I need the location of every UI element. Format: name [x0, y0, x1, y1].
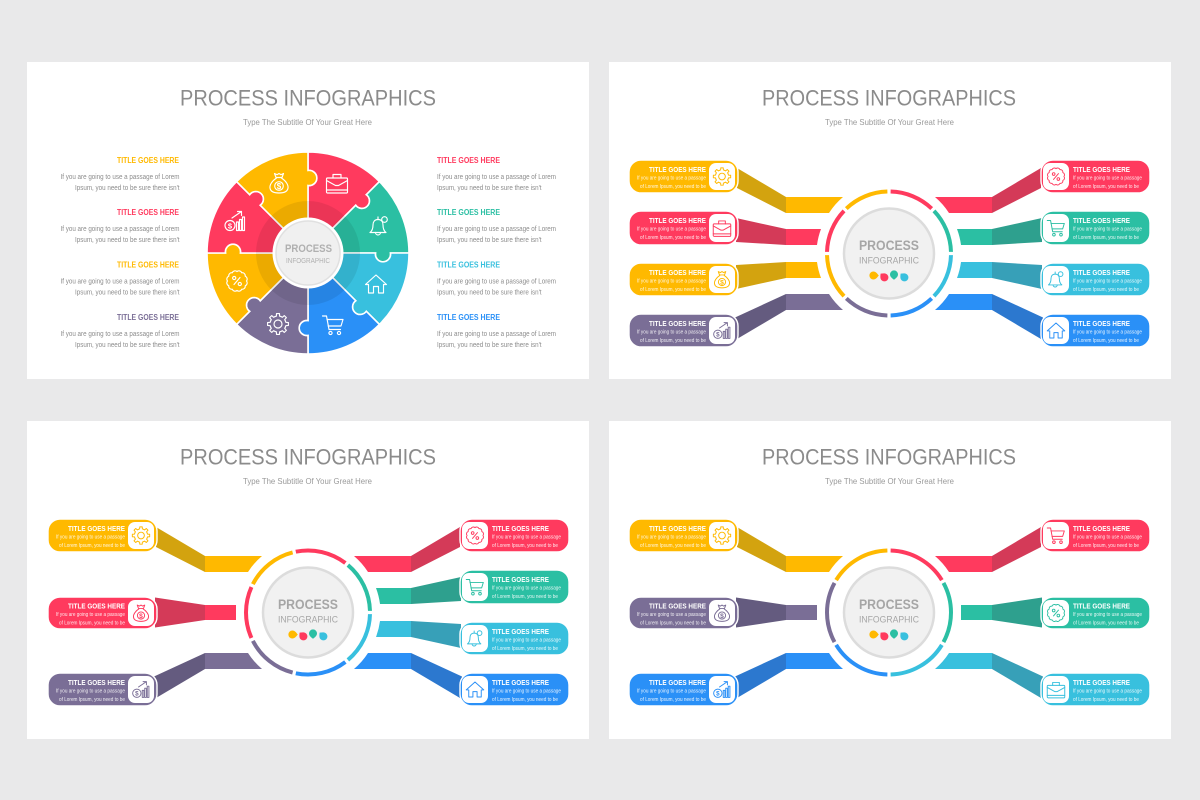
icon: percent badge: [227, 271, 247, 291]
tag: green cart: of Lorem Ipsum, you need to be: [1073, 235, 1139, 241]
tag: red cart: of Lorem Ipsum, you need to be: [1073, 543, 1139, 549]
text block left 3: If you are going to use a passage of Lorem: [60, 278, 180, 286]
tag: red percent: TITLE GOES HERE: [492, 524, 549, 533]
title: PROCESS INFOGRAPHICS: [762, 86, 1016, 110]
text block left 3: Ipsum, you need to be sure there isn't: [75, 290, 180, 296]
puzzle wheel: [186, 131, 430, 375]
icon: home: [366, 275, 386, 293]
tag: purple chart: of Lorem Ipsum, you need to be: [59, 697, 125, 703]
tag: red percent: of Lorem Ipsum, you need to be: [492, 543, 558, 549]
tag: yellow gear: [629, 519, 738, 552]
text block left 4: TITLE GOES HERE: [117, 313, 180, 322]
tag: yellow money bag: TITLE GOES HERE: [649, 268, 706, 277]
tag: cyan briefcase: If you are going to use a passage: [1073, 688, 1142, 694]
tag: purple chart: TITLE GOES HERE: [68, 678, 125, 687]
tag: blue home: TITLE GOES HERE: [1073, 319, 1130, 328]
subtitle: Type The Subtitle Of Your Great Here: [825, 117, 954, 127]
tag: red percent: [460, 519, 569, 552]
tag: green percent: If you are going to use a passage: [1073, 612, 1142, 618]
tag: blue home: [460, 673, 569, 706]
tag: green cart: [460, 570, 569, 604]
text block left 1: Ipsum, you need to be sure there isn't: [75, 185, 180, 192]
tag: red percent: of Lorem Ipsum, you need to be: [1073, 184, 1139, 190]
connectors and hub: [735, 168, 1043, 339]
tag: purple money bag: of Lorem Ipsum, you need to be: [640, 620, 706, 626]
title: PROCESS INFOGRAPHICS: [180, 444, 436, 470]
text block right 2: Ipsum, you need to be sure there isn't: [437, 237, 542, 244]
tag: red cart: TITLE GOES HERE: [1073, 524, 1130, 533]
text block left 4: If you are going to use a passage of Lorem: [60, 331, 180, 338]
tag: blue home: of Lorem Ipsum, you need to be: [492, 697, 558, 703]
tag: green percent: [1041, 597, 1150, 629]
tag: red briefcase: If you are going to use a passage: [637, 226, 706, 232]
text block right 3: [437, 260, 556, 296]
tag: blue home: TITLE GOES HERE: [492, 678, 549, 687]
tag: purple chart: TITLE GOES HERE: [649, 319, 706, 328]
icon: growth chart: [225, 212, 244, 230]
tag: blue chart: [629, 673, 738, 706]
text block left 1: [60, 156, 180, 192]
title: PROCESS INFOGRAPHICS: [180, 86, 436, 110]
tag: purple money bag: If you are going to use a passage: [637, 612, 706, 618]
tag: red cart: If you are going to use a passage: [1073, 534, 1142, 540]
tag: green cart: TITLE GOES HERE: [492, 575, 549, 584]
tag: yellow gear: If you are going to use a passage: [56, 534, 125, 540]
text block right 1: Ipsum, you need to be sure there isn't: [437, 185, 542, 192]
tag: purple money bag: TITLE GOES HERE: [649, 602, 706, 610]
text block right 2: [437, 208, 556, 244]
tag: red percent: TITLE GOES HERE: [1073, 165, 1130, 174]
tag: cyan bell: If you are going to use a passage: [492, 638, 561, 644]
tag: yellow gear: TITLE GOES HERE: [649, 165, 706, 174]
text block right 4: If you are going to use a passage of Lorem: [437, 331, 556, 338]
tag: blue chart: If you are going to use a passage: [637, 688, 706, 694]
connectors and hub: INFOGRAPHIC: [278, 614, 338, 624]
panel: eight-step connector slide: [609, 62, 1171, 379]
tag: yellow gear: TITLE GOES HERE: [68, 524, 125, 533]
tag: blue chart: of Lorem Ipsum, you need to be: [640, 697, 706, 703]
tag: yellow gear: of Lorem Ipsum, you need to be: [640, 184, 706, 190]
wheel hub label: [285, 243, 332, 265]
tag: green percent: of Lorem Ipsum, you need to be: [1073, 620, 1139, 626]
tag: purple chart: If you are going to use a passage: [637, 330, 706, 336]
tag: cyan briefcase: of Lorem Ipsum, you need to be: [1073, 697, 1139, 703]
text block left 2: Ipsum, you need to be sure there isn't: [75, 237, 180, 244]
tag: yellow gear: If you are going to use a passage: [637, 176, 706, 182]
tag: blue home: If you are going to use a passage: [492, 688, 561, 694]
tag: cyan bell: [460, 622, 569, 655]
icon: money bag: [270, 174, 288, 193]
tag: yellow gear: [629, 160, 738, 193]
tag: red cart: [1041, 519, 1150, 552]
tag: yellow money bag: If you are going to use a passage: [637, 278, 706, 284]
tag: red percent: [1041, 160, 1150, 193]
text block left 4: Ipsum, you need to be sure there isn't: [75, 342, 180, 349]
panel: puzzle wheel slide: [27, 62, 589, 379]
tag: red briefcase: of Lorem Ipsum, you need to be: [640, 235, 706, 241]
tag: red money bag: TITLE GOES HERE: [68, 602, 125, 610]
text block right 4: [437, 313, 556, 349]
tag: yellow gear: TITLE GOES HERE: [649, 524, 706, 533]
icon: cart: [322, 316, 343, 335]
tag: purple chart: [48, 673, 157, 706]
tag: blue chart: TITLE GOES HERE: [649, 678, 706, 687]
connectors and hub: INFOGRAPHIC: [859, 255, 919, 265]
tag: yellow gear: If you are going to use a passage: [637, 534, 706, 540]
text block right 2: TITLE GOES HERE: [437, 208, 501, 217]
tag: green percent: TITLE GOES HERE: [1073, 602, 1130, 610]
tag: blue home: of Lorem Ipsum, you need to be: [1073, 338, 1139, 344]
tag: red money bag: If you are going to use a passage: [56, 612, 125, 618]
text block right 3: If you are going to use a passage of Lorem: [437, 278, 556, 286]
text block right 2: If you are going to use a passage of Lorem: [437, 226, 556, 233]
tag: cyan bell: of Lorem Ipsum, you need to be: [492, 646, 558, 652]
connectors and hub: [154, 527, 462, 698]
tag: red money bag: [48, 597, 157, 629]
title: PROCESS INFOGRAPHICS: [762, 444, 1016, 470]
tag: purple money bag: [629, 597, 738, 629]
wheel hub label: INFOGRAPHIC: [286, 258, 330, 265]
tag: cyan bell: If you are going to use a passage: [1073, 278, 1142, 284]
text block right 1: [437, 156, 556, 192]
text block right 4: TITLE GOES HERE: [437, 313, 501, 322]
text block left 1: If you are going to use a passage of Lorem: [60, 174, 180, 181]
tag: cyan bell: TITLE GOES HERE: [1073, 268, 1130, 277]
tag: red percent: If you are going to use a passage: [1073, 176, 1142, 182]
text block right 3: TITLE GOES HERE: [437, 260, 501, 270]
icon: gear: [268, 314, 288, 334]
tag: red briefcase: [629, 211, 738, 245]
text block left 4: [60, 313, 180, 349]
connectors and hub: INFOGRAPHIC: [859, 614, 919, 624]
tag: yellow gear: of Lorem Ipsum, you need to be: [640, 543, 706, 549]
tag: yellow gear: of Lorem Ipsum, you need to be: [59, 543, 125, 549]
text block right 4: Ipsum, you need to be sure there isn't: [437, 342, 542, 349]
text block left 2: If you are going to use a passage of Lorem: [60, 226, 180, 233]
connectors and hub: PROCESS: [859, 597, 919, 612]
tag: cyan bell: [1041, 263, 1150, 296]
icon: briefcase: [326, 174, 348, 193]
text block left 2: [60, 208, 180, 244]
tag: cyan bell: of Lorem Ipsum, you need to be: [1073, 287, 1139, 293]
text block right 1: If you are going to use a passage of Lorem: [437, 174, 556, 181]
panel: six-step connector slide: [609, 421, 1171, 739]
text block left 3: [60, 260, 180, 296]
text block right 1: TITLE GOES HERE: [437, 156, 501, 165]
tag: purple chart: If you are going to use a passage: [56, 688, 125, 694]
subtitle: Type The Subtitle Of Your Great Here: [243, 476, 372, 486]
connectors and hub: [735, 527, 1043, 698]
tag: yellow money bag: of Lorem Ipsum, you need to be: [640, 287, 706, 293]
connectors and hub: PROCESS: [278, 597, 338, 612]
tag: green cart: If you are going to use a passage: [1073, 226, 1142, 232]
tag: cyan briefcase: TITLE GOES HERE: [1073, 678, 1130, 687]
text block left 2: TITLE GOES HERE: [117, 208, 180, 217]
text block left 1: TITLE GOES HERE: [117, 156, 180, 165]
tag: red briefcase: TITLE GOES HERE: [649, 216, 706, 225]
tag: green cart: of Lorem Ipsum, you need to be: [492, 594, 558, 600]
tag: green cart: If you are going to use a passage: [492, 586, 561, 592]
wheel hub label: PROCESS: [285, 243, 332, 255]
subtitle: Type The Subtitle Of Your Great Here: [825, 476, 954, 486]
tag: green cart: TITLE GOES HERE: [1073, 216, 1130, 225]
tag: purple chart: [629, 314, 738, 347]
tag: blue home: If you are going to use a passage: [1073, 330, 1142, 336]
tag: blue home: [1041, 314, 1150, 347]
tag: purple chart: of Lorem Ipsum, you need to be: [640, 338, 706, 344]
connectors and hub: PROCESS: [859, 238, 919, 253]
subtitle: Type The Subtitle Of Your Great Here: [243, 117, 372, 127]
tag: red percent: If you are going to use a passage: [492, 534, 561, 540]
tag: cyan briefcase: [1041, 673, 1150, 706]
tag: red money bag: of Lorem Ipsum, you need to be: [59, 620, 125, 626]
tag: yellow gear: [48, 519, 157, 552]
text block left 3: TITLE GOES HERE: [117, 260, 180, 270]
tag: yellow money bag: [629, 263, 738, 296]
tag: cyan bell: TITLE GOES HERE: [492, 627, 549, 636]
text block right 3: Ipsum, you need to be sure there isn't: [437, 290, 542, 296]
icon: bell: [370, 217, 387, 235]
panel: seven-step connector slide: [27, 421, 589, 739]
tag: green cart: [1041, 211, 1150, 245]
